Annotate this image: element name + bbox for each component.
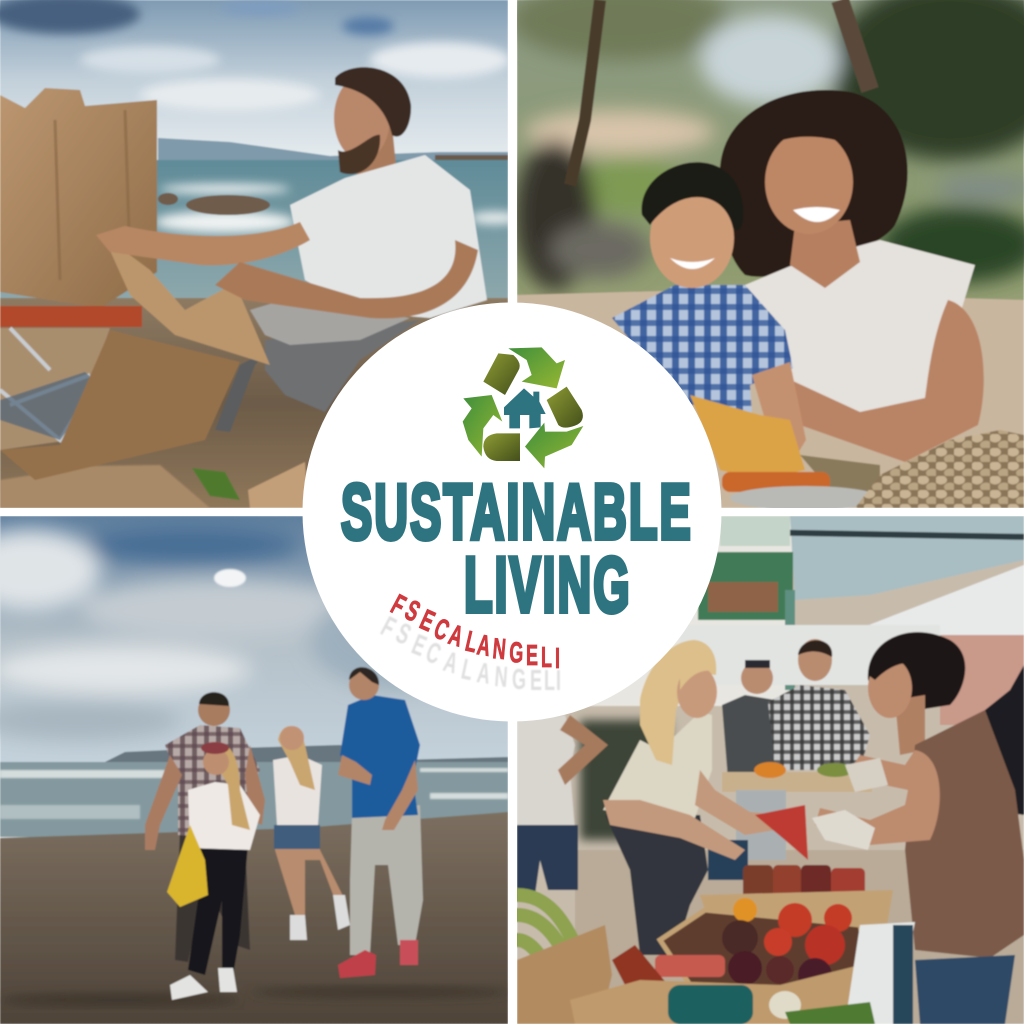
vendors in background — [708, 639, 1024, 880]
beach backdrop: sky, sea and sand — [0, 0, 520, 508]
beach backdrop: cloudy sky, sea and sand — [0, 516, 520, 1024]
boy in plaid shirt — [612, 162, 806, 466]
woman in white t-shirt — [273, 726, 350, 940]
distorted red brand text with shadow: L — [541, 642, 552, 674]
panel: farmers market stall — [517, 516, 1024, 1024]
man in plaid shirt — [145, 692, 265, 962]
title — [341, 468, 693, 628]
man with paper — [96, 67, 487, 432]
distorted red brand text with shadow: S — [400, 594, 425, 629]
crates of vegetables — [517, 890, 915, 1024]
distorted red brand text with shadow: A — [475, 629, 493, 663]
distorted red brand text with shadow: L — [462, 625, 480, 659]
table produce: pastries, tomatoes, nuts — [690, 395, 1024, 510]
distorted red brand text with shadow: C — [422, 636, 445, 671]
shopper at left — [517, 715, 608, 895]
panel: mother and son at a market — [510, 0, 1024, 510]
blonde woman shopping — [603, 640, 780, 955]
distorted red brand text with shadow: G — [509, 637, 524, 670]
woman with yellow bag — [167, 742, 260, 1000]
distorted red brand text with shadow: F — [376, 611, 401, 645]
icon: upper paper bag — [0, 88, 157, 308]
central white logo circle — [302, 302, 722, 722]
distorted red brand text with shadow: A — [440, 646, 461, 681]
distorted red brand text with shadow: A — [475, 657, 492, 691]
red folding table — [0, 306, 142, 440]
panel: man folding paper bags on the beach — [0, 0, 520, 508]
distorted red brand text with shadow — [376, 589, 561, 697]
distorted red brand text with shadow: N — [491, 633, 507, 666]
distorted red brand text with shadow: E — [415, 604, 439, 638]
distorted red brand text with shadow: A — [445, 619, 467, 654]
distorted red brand text with shadow: L — [459, 653, 476, 687]
woman vendor with brown top — [755, 632, 1024, 1024]
title: LIVING — [464, 541, 632, 628]
park backdrop — [510, 0, 1024, 508]
title: SUSTAINABLE — [341, 468, 693, 555]
man in blue polo — [338, 667, 423, 978]
distorted red brand text with shadow: I — [556, 665, 561, 697]
distorted red brand text with shadow: C — [429, 613, 453, 648]
jars of preserves — [742, 864, 866, 895]
panel: friends walking on the beach — [0, 516, 520, 1024]
distorted red brand text with shadow: I — [555, 643, 560, 675]
distorted red brand text with shadow: E — [526, 640, 538, 672]
distorted red brand text with shadow: S — [391, 617, 416, 652]
icon: recycling arrows with house — [463, 347, 583, 468]
icon: lower paper bag — [0, 330, 240, 480]
distorted red brand text with shadow: E — [407, 629, 431, 663]
distorted red brand text with shadow: F — [386, 589, 411, 623]
distorted red brand text with shadow: G — [512, 664, 526, 696]
distorted red brand text with shadow: N — [493, 661, 509, 694]
distorted red brand text with shadow: L — [544, 665, 555, 697]
woman smiling — [720, 90, 984, 462]
distorted red brand text with shadow: E — [530, 665, 542, 697]
market backdrop with tents — [517, 516, 1024, 1024]
